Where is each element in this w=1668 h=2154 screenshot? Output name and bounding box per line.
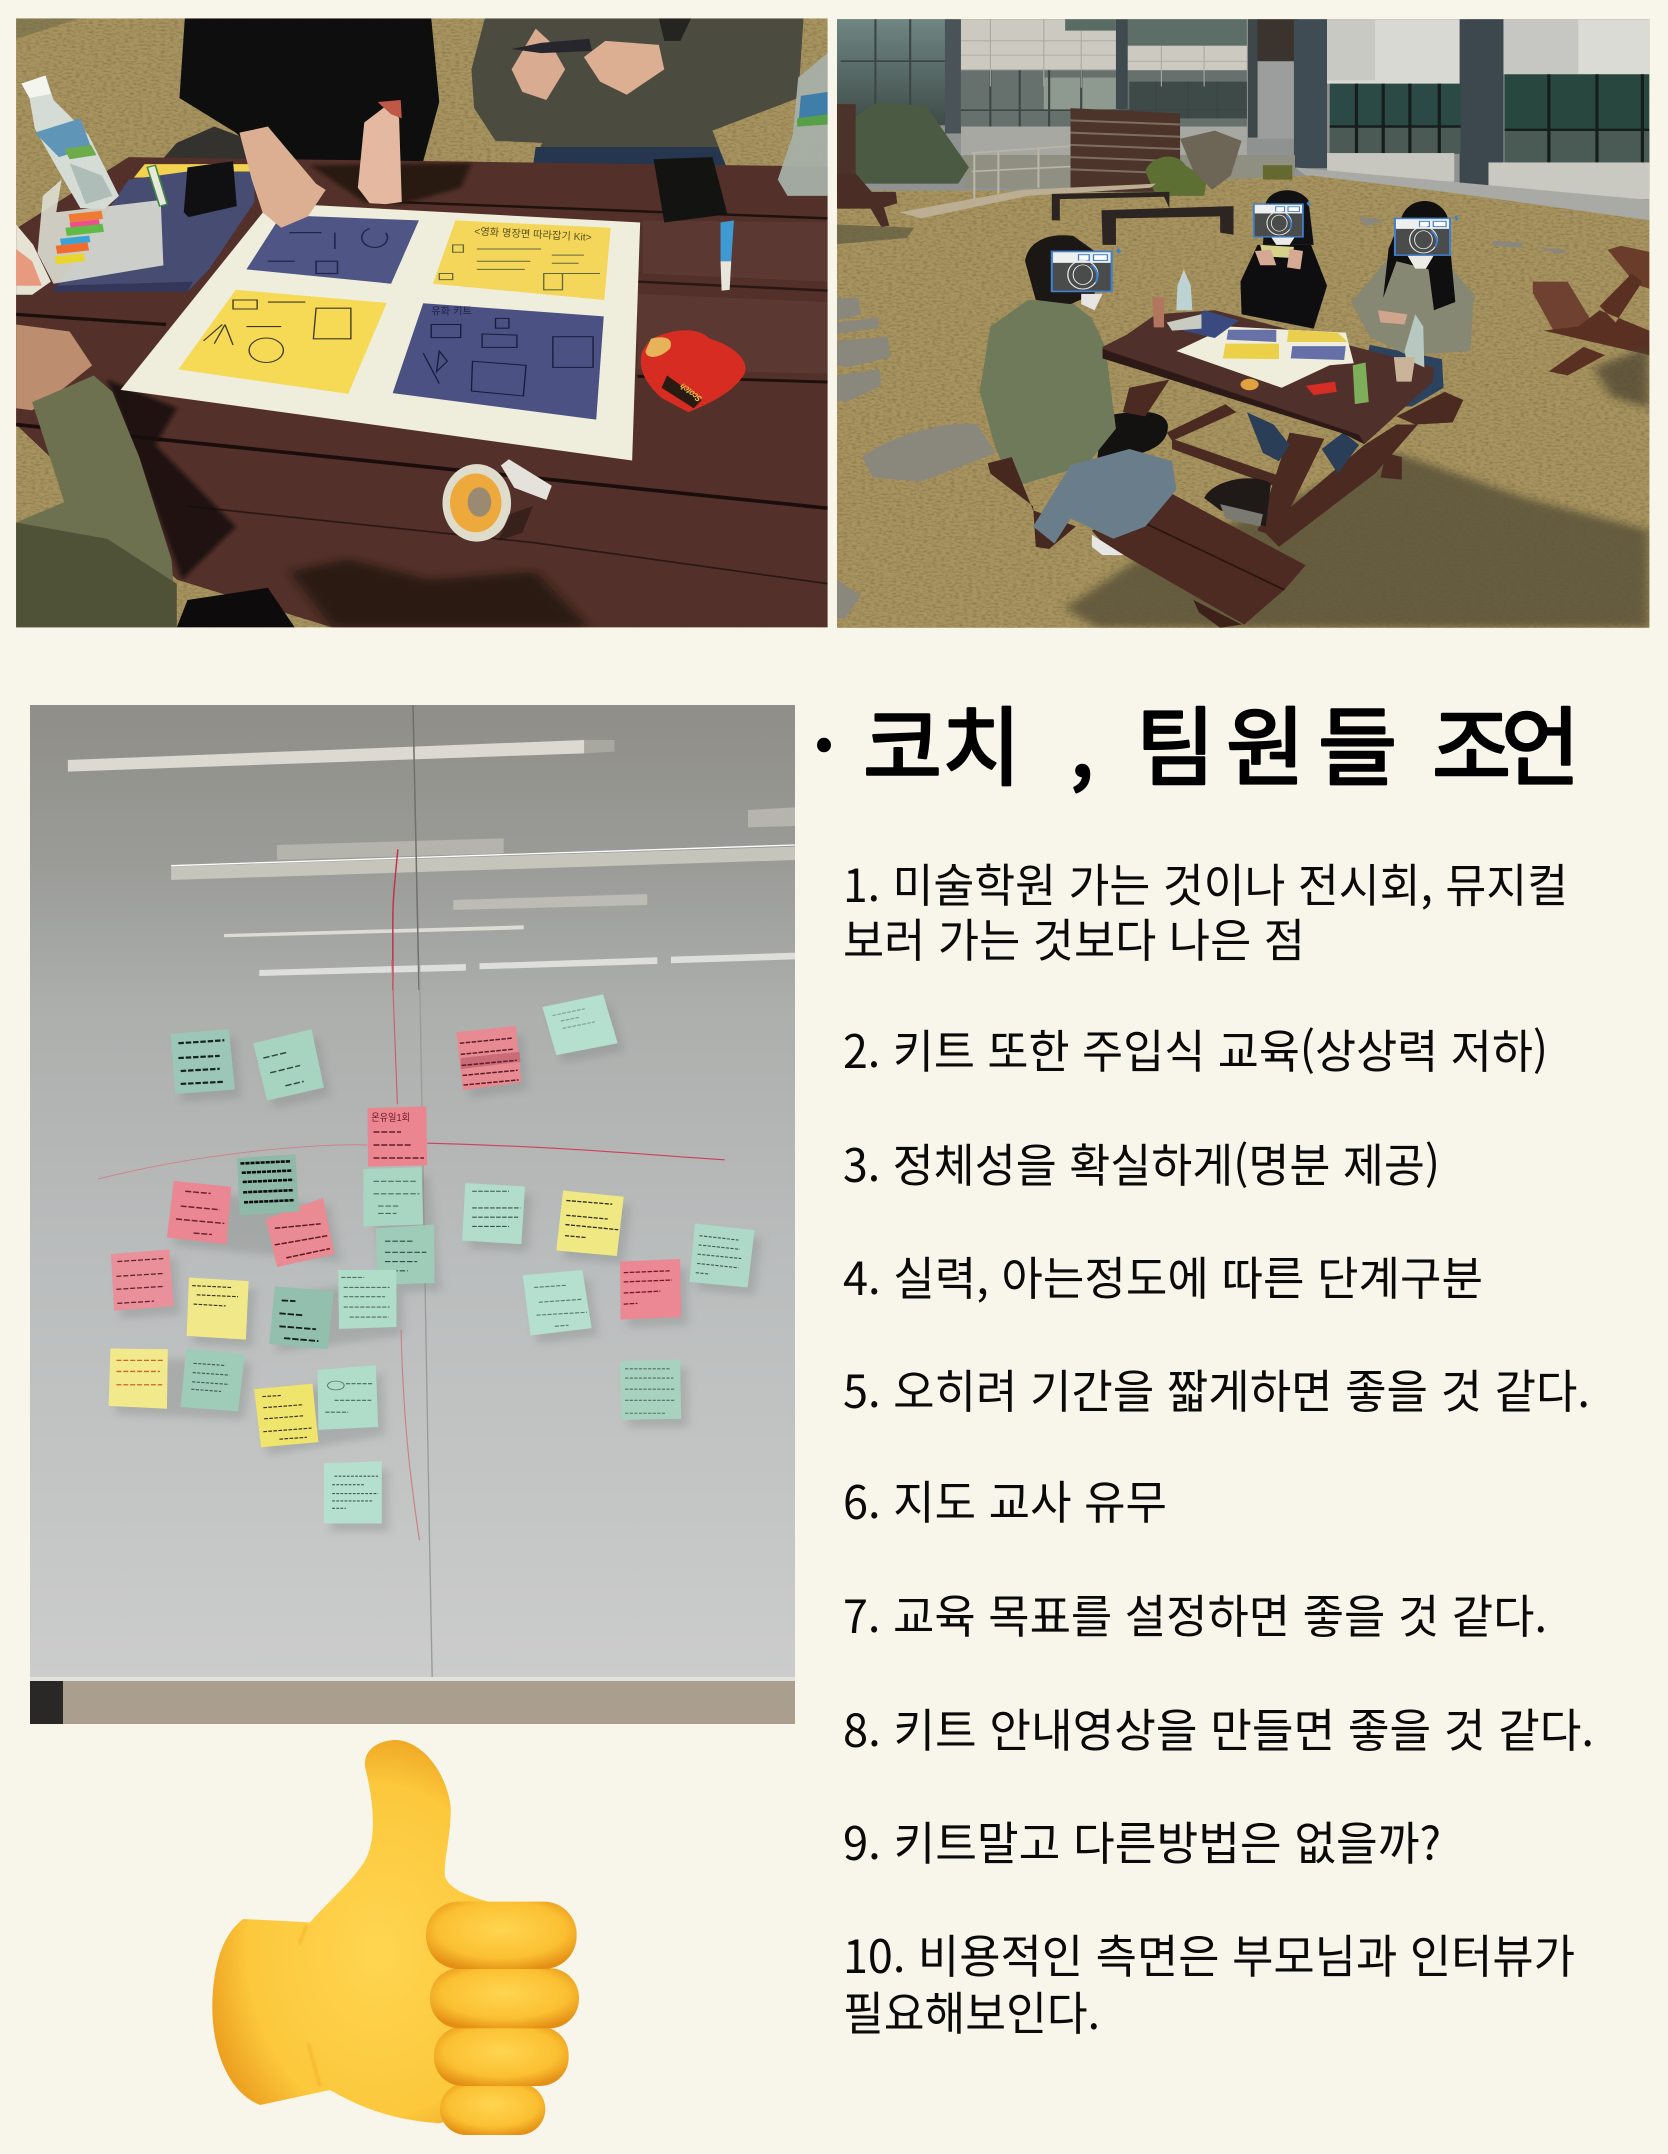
note: pink dark mint overlap bbox=[237, 1154, 334, 1267]
forearm and fist of person in green, bottom left bbox=[16, 325, 295, 627]
note: mint kit text 2 bbox=[376, 1225, 435, 1285]
item 3: 3. 정체성을 확실하게(명분 제공) bbox=[843, 1130, 1440, 1196]
woman in grey jacket bbox=[1351, 201, 1474, 408]
navy sheet: oil paint kit: 유화 키트 bbox=[431, 305, 472, 317]
item 6: 6. 지도 교사 유무 bbox=[843, 1467, 1167, 1533]
note: mint bottom bbox=[324, 1461, 382, 1524]
note: centre pink: 온유일1회 bbox=[371, 1113, 410, 1124]
title: · 코치 , 팀원들 조언 bbox=[812, 678, 1580, 803]
black phone left bbox=[184, 161, 237, 217]
person in olive jacket bbox=[471, 18, 804, 165]
note shadows bbox=[115, 1003, 761, 1532]
list of feedback items bbox=[843, 850, 1594, 2044]
item 1 bbox=[843, 850, 1568, 971]
photo: table with kit sketches bbox=[16, 18, 828, 627]
item 8: 8. 키트 안내영상을 만들면 좋을 것 같다. bbox=[843, 1695, 1594, 1761]
photo: whiteboard with sticky notes bbox=[30, 703, 796, 1730]
foreground bench bbox=[988, 457, 1306, 628]
item 10: 10. 비용적인 측면은 부모님과 인터뷰가 bbox=[843, 1921, 1575, 1987]
note: mint far right bbox=[689, 1223, 755, 1287]
green marker bbox=[147, 165, 167, 206]
bottle right bbox=[778, 53, 828, 196]
navy sheet with sketches bbox=[246, 215, 419, 284]
note: yellow lower left bbox=[109, 1348, 168, 1409]
note: yellow left bbox=[187, 1277, 249, 1340]
soda can bbox=[16, 225, 51, 295]
camera icon over face, centre bbox=[1254, 201, 1311, 237]
note: mint black text bbox=[171, 1029, 235, 1094]
note: mint right bbox=[462, 1183, 525, 1244]
lawn bbox=[837, 176, 1649, 628]
item 7: 7. 교육 목표를 설정하면 좋을 것 같다. bbox=[843, 1581, 1547, 1647]
icon: thumbs-up emoji bbox=[212, 1740, 579, 2135]
man in olive jacket bbox=[980, 235, 1168, 487]
note: mint tilted bbox=[253, 1029, 324, 1101]
note: yellow lower bbox=[254, 1384, 318, 1447]
note: mint lower centre bbox=[317, 1365, 378, 1430]
wooden table bbox=[16, 157, 828, 627]
stepping stones bbox=[837, 216, 1568, 618]
picnic table top bbox=[1103, 310, 1434, 444]
note: light mint top right bbox=[542, 994, 618, 1055]
light reflections on whiteboard bbox=[68, 703, 796, 990]
sticky notes cluster bbox=[98, 960, 761, 1730]
note: mint right low bbox=[523, 1270, 592, 1336]
water bottle left bbox=[21, 76, 119, 209]
item 10: 필요해보인다. bbox=[843, 1978, 1100, 2044]
person in black top bbox=[161, 18, 439, 161]
camera icon over face, right bbox=[1395, 215, 1459, 255]
note: centre pink bbox=[368, 1107, 427, 1166]
park benches bbox=[1052, 192, 1234, 245]
note: pink conclusion bbox=[167, 1181, 231, 1244]
ground shadow bbox=[1065, 453, 1649, 628]
woman in black seated centre bbox=[1240, 190, 1327, 329]
note: mint lower left bbox=[181, 1348, 245, 1411]
item 5: 5. 오히려 기간을 짧게하면 좋을 것 같다. bbox=[843, 1356, 1590, 1422]
note: darker mint bbox=[269, 1286, 334, 1349]
building background bbox=[837, 19, 1649, 220]
item 1: 1. 미술학원 가는 것이나 전시회, 뮤지컬 bbox=[843, 850, 1568, 916]
pouch of markers bbox=[37, 180, 163, 284]
note: pink left bbox=[111, 1249, 174, 1311]
red scotch tape packaging bbox=[641, 330, 746, 412]
legs and bag under table bbox=[1204, 412, 1359, 527]
picnic table legs bbox=[1123, 380, 1463, 547]
note: yellow right bbox=[556, 1191, 624, 1256]
item 10 bbox=[843, 1921, 1575, 2044]
cardigan on bench bbox=[1033, 449, 1176, 555]
table far right bbox=[1533, 246, 1649, 408]
note: mint right bottom bbox=[620, 1360, 681, 1420]
phone right bbox=[654, 157, 727, 222]
yellow sheet with kit plan bbox=[433, 220, 611, 300]
note: mint kit text bbox=[363, 1167, 423, 1226]
items on table bbox=[1152, 269, 1424, 404]
photo: team at picnic table outdoors bbox=[837, 19, 1649, 628]
yellow sheet with kit plan: <영화 명장면 따라잡기 Kit> bbox=[474, 226, 592, 244]
note: pink right bbox=[620, 1259, 681, 1320]
camera icon over face, left bbox=[1052, 248, 1121, 291]
navy sheet: oil paint kit bbox=[393, 303, 604, 420]
table far left bbox=[837, 173, 914, 244]
item 2: 2. 키트 또한 주입식 교육(상상력 저하) bbox=[843, 1016, 1548, 1082]
red scotch tape packaging: Scotch bbox=[676, 382, 705, 403]
item 1: 보러 가는 것보다 나은 점 bbox=[843, 905, 1305, 971]
item 9: 9. 키트말고 다른방법은 없을까? bbox=[843, 1808, 1441, 1874]
yellow sheet with tripod sketch bbox=[178, 290, 387, 394]
note: mint centre low bbox=[338, 1270, 396, 1329]
cream poster board bbox=[121, 203, 640, 460]
bushes and wooden fence bbox=[837, 102, 1292, 218]
hands on table bbox=[239, 29, 664, 228]
blue marker bbox=[721, 220, 734, 291]
stacked navy paper and yellow sheet bbox=[54, 164, 254, 292]
note: pink folded bbox=[456, 1026, 521, 1090]
whiteboard tray bbox=[30, 1677, 795, 1724]
poster on table bbox=[1176, 327, 1354, 388]
item 4: 4. 실력, 아는정도에 따른 단계구분 bbox=[843, 1243, 1483, 1309]
tape dispenser bbox=[442, 459, 552, 542]
